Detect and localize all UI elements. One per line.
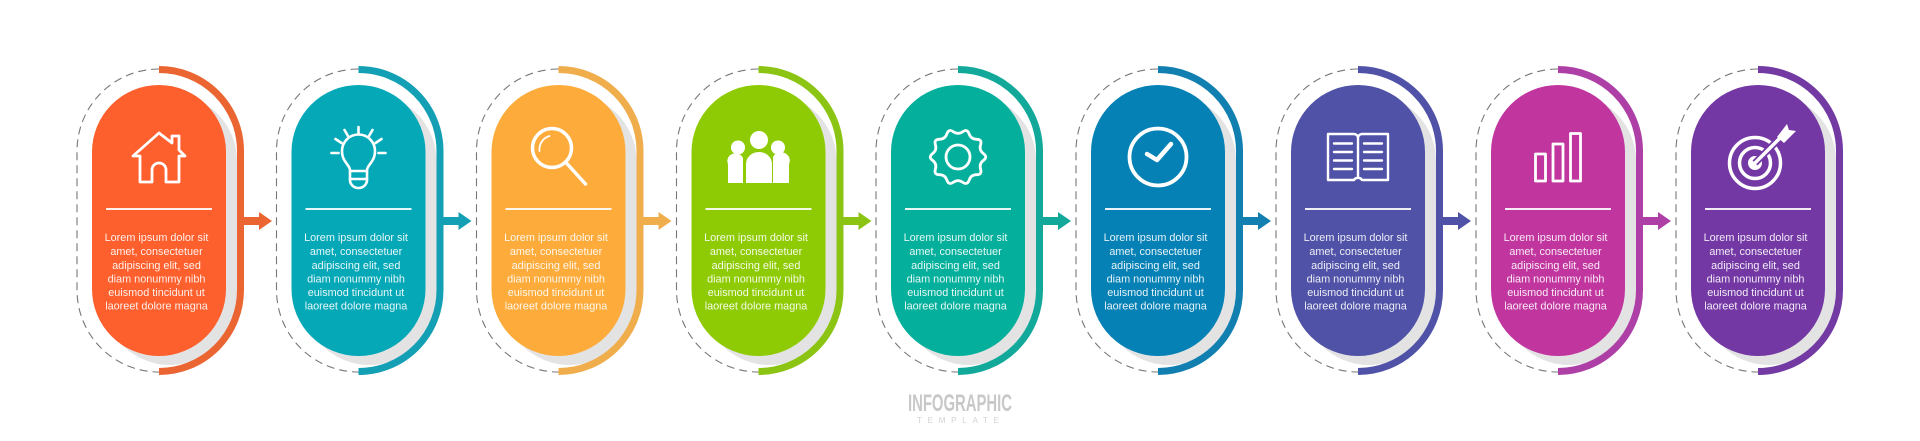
text block: step 2: adipiscing elit, sed [312,260,400,272]
text block: step 3: laoreet dolore magna [505,300,608,312]
title: infographic template: INFOGRAPHIC [908,390,1012,417]
text block: step 6: adipiscing elit, sed [1111,260,1200,272]
text block: step 8: adipiscing elit, sed [1511,260,1600,272]
text block: step 2: Lorem ipsum dolor sit [304,232,408,244]
text block: step 1: diam nonummy nibh [108,274,205,286]
text block: step 7: Lorem ipsum dolor sit [1304,232,1407,244]
icon: open book [1328,134,1388,180]
text block: step 7: diam nonummy nibh [1307,274,1404,286]
arrow: step 2 to 3 [444,212,472,230]
icon: gear [930,131,986,183]
text block: step 5: Lorem ipsum dolor sit [904,232,1007,244]
text block: step 4: diam nonummy nibh [707,274,805,286]
text block: step 3: Lorem ipsum dolor sit [504,232,608,244]
text block: step 4: amet, consectetuer [710,246,803,258]
text block: step 4: laoreet dolore magna [705,300,808,312]
title: infographic template [908,390,1012,425]
text block: step 1: amet, consectetuer [110,246,203,258]
text block: step 8: amet, consectetuer [1509,246,1602,258]
text block: step 2: amet, consectetuer [310,246,403,258]
text block: step 6: laoreet dolore magna [1104,300,1208,312]
arrow: step 6 to 7 [1243,212,1271,230]
panel: step 8 chart [1476,69,1671,372]
panel: step 4 team [676,69,872,372]
panel: step 7 book [1276,69,1471,372]
panel: step 6 check [1076,69,1271,372]
icon: magnifier [532,128,586,184]
text block: step 7: laoreet dolore magna [1304,300,1408,312]
text block: step 3: adipiscing elit, sed [512,260,600,272]
icon: people [727,131,790,183]
panel: step 2 idea [276,69,472,372]
text block: step 9: amet, consectetuer [1709,246,1802,258]
text block: step 4: Lorem ipsum dolor sit [704,232,808,244]
icon: house [133,133,185,182]
arrow: step 3 to 4 [644,212,672,230]
text block: step 5: diam nonummy nibh [907,274,1004,286]
text block: step 8: diam nonummy nibh [1507,274,1604,286]
arrow: step 7 to 8 [1443,212,1471,230]
text block: step 6: amet, consectetuer [1109,246,1202,258]
text block: step 4: euismod tincidunt ut [708,287,804,299]
text block: step 5: amet, consectetuer [909,246,1002,258]
text block: step 5: adipiscing elit, sed [911,260,1000,272]
text block: step 6: diam nonummy nibh [1107,274,1204,286]
text block: step 9: adipiscing elit, sed [1711,260,1800,272]
title: infographic template: TEMPLATE [917,416,999,425]
text block: step 8: euismod tincidunt ut [1507,287,1604,299]
text block: step 7: adipiscing elit, sed [1311,260,1400,272]
arrow: step 1 to 2 [244,212,272,230]
panel: step 5 settings [876,69,1071,372]
text block: step 2: diam nonummy nibh [307,274,405,286]
text block: step 3: amet, consectetuer [510,246,603,258]
text block: step 6: euismod tincidunt ut [1107,287,1204,299]
text block: step 9: diam nonummy nibh [1707,274,1804,286]
text block: step 9: euismod tincidunt ut [1707,287,1804,299]
text block: step 9: laoreet dolore magna [1704,300,1808,312]
text block: step 1: adipiscing elit, sed [112,260,201,272]
icon: target with arrow [1730,124,1796,188]
panel: step 9 target [1676,69,1840,372]
text block: step 5: euismod tincidunt ut [907,287,1004,299]
text block: step 1: euismod tincidunt ut [108,287,205,299]
text block: step 7: euismod tincidunt ut [1307,287,1404,299]
text block: step 1: laoreet dolore magna [105,300,209,312]
text block: step 2: laoreet dolore magna [305,300,408,312]
text block: step 9: Lorem ipsum dolor sit [1704,232,1807,244]
arrow: step 4 to 5 [844,212,872,230]
icon: bar chart [1536,134,1580,181]
text block: step 5: laoreet dolore magna [904,300,1008,312]
arrow: step 8 to 9 [1643,212,1671,230]
text block: step 6: Lorem ipsum dolor sit [1104,232,1207,244]
text block: step 7: amet, consectetuer [1309,246,1402,258]
panel: step 1 home [77,69,272,372]
text block: step 8: laoreet dolore magna [1504,300,1608,312]
arrow: step 5 to 6 [1043,212,1071,230]
icon: light bulb [332,127,386,188]
text block: step 2: euismod tincidunt ut [308,287,404,299]
text block: step 4: adipiscing elit, sed [712,260,800,272]
panel: step 3 search [476,69,672,372]
text block: step 8: Lorem ipsum dolor sit [1504,232,1607,244]
text block: step 3: euismod tincidunt ut [508,287,604,299]
text block: step 3: diam nonummy nibh [507,274,605,286]
icon: check circle [1130,128,1186,186]
text block: step 1: Lorem ipsum dolor sit [105,232,208,244]
